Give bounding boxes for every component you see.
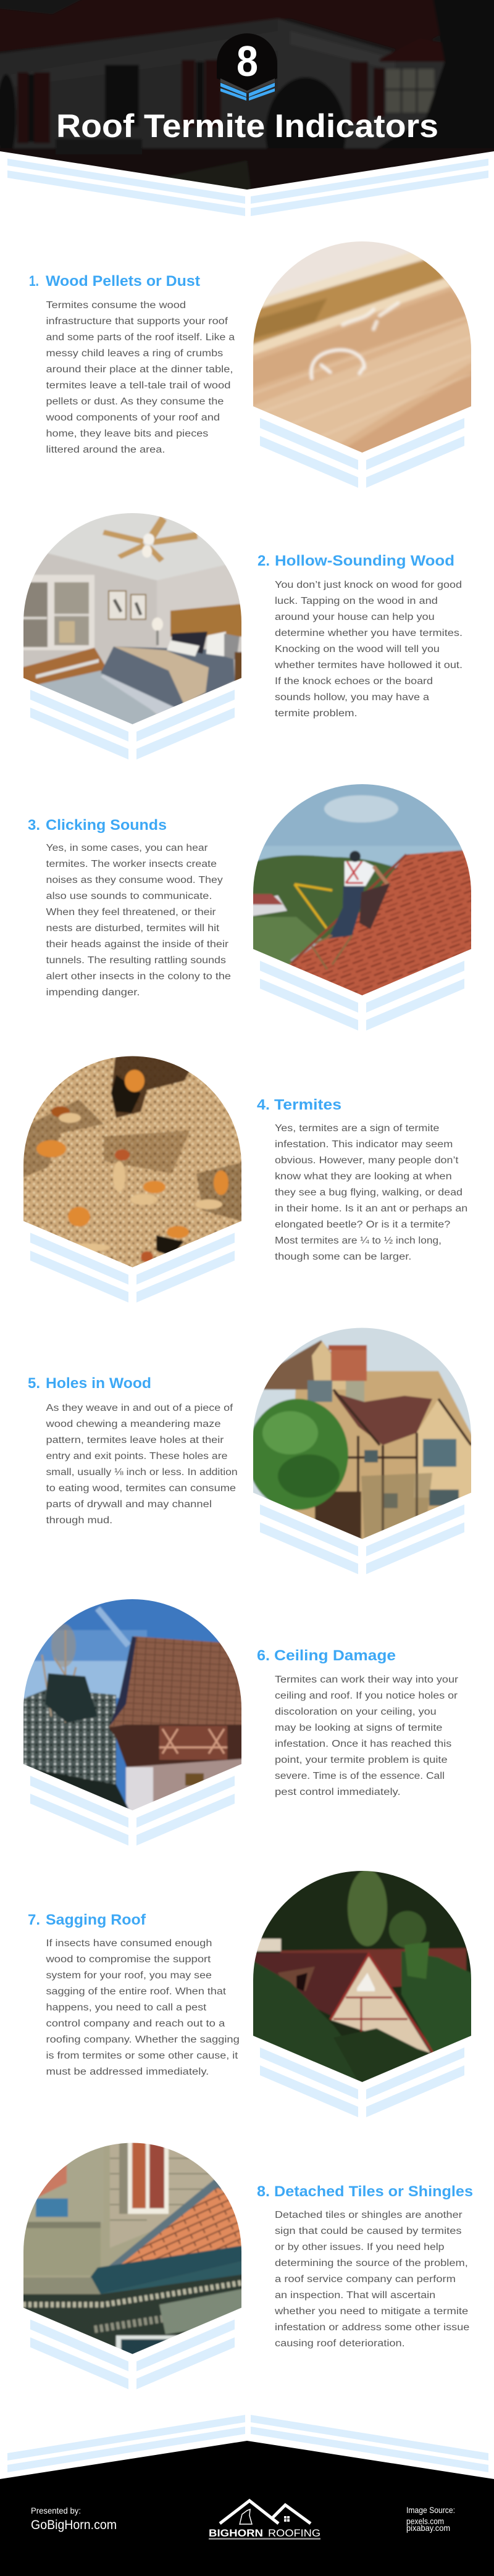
text block 5: wood chewing a meandering maze <box>45 1419 220 1429</box>
text block 7 <box>45 1938 240 2077</box>
text block 4: though some can be larger. <box>275 1252 411 1262</box>
text block 4 <box>275 1123 467 1262</box>
heading 7: 7. <box>28 1912 40 1928</box>
text block 7: wood to compromise the support <box>45 1954 211 1965</box>
logo: Bighorn Roofing: BIGHORN <box>209 2527 263 2539</box>
bed <box>101 674 173 714</box>
text block 6: infestation. Once it has reached this <box>275 1739 451 1749</box>
text block 7: system for your roof, you may see <box>46 1970 212 1981</box>
text block 6: may be looking at signs of termite <box>275 1723 442 1733</box>
image: timber barn <box>17 1593 248 1846</box>
heading 8: Detached Tiles or Shingles <box>274 2183 473 2200</box>
text block 1: around their place at the dinner table, <box>46 364 233 375</box>
text block 8 <box>274 2210 469 2349</box>
image: roofer on tiled roof <box>247 778 477 1031</box>
ceiling fan <box>103 516 198 562</box>
image: tudor house <box>247 1321 477 1574</box>
panel: 8 detached tiles or shingles <box>17 2136 473 2390</box>
text block 7: must be addressed immediately. <box>46 2067 209 2077</box>
heading 5: Holes in Wood <box>46 1375 151 1392</box>
image: wooden facade with orange tiles <box>17 2136 248 2390</box>
termites <box>34 1069 228 1262</box>
presented by: GoBigHorn.com <box>31 2518 117 2532</box>
text block 3 <box>46 843 231 998</box>
text block 7: control company and reach out to a <box>46 2018 225 2029</box>
panel: 4 termites <box>17 1050 467 1303</box>
panel: 2 hollow-sounding wood <box>17 507 463 759</box>
text block 3: When they feel threatened, or their <box>46 907 216 918</box>
text block 2: Knocking on the wood will tell you <box>275 644 440 654</box>
heading 3: 3. <box>28 817 40 834</box>
text block 5: pattern, termites leave holes at their <box>46 1435 224 1445</box>
title: Roof Termite Indicators <box>56 108 438 144</box>
text block 4: Most termites are ¼ to ½ inch long, <box>275 1236 442 1246</box>
heading 4: Termites <box>274 1097 341 1113</box>
text block 6: point, your termite problem is quite <box>275 1755 448 1765</box>
floor <box>23 647 106 685</box>
header photo: house at dusk <box>0 0 494 204</box>
logo: Bighorn Roofing <box>209 2501 320 2540</box>
text block 2: whether termites have hollowed it out. <box>274 660 463 671</box>
text block 1 <box>45 300 235 455</box>
headboard <box>170 603 248 637</box>
heading 6: 6. <box>257 1647 270 1664</box>
text block 8: determining the source of the problem, <box>275 2258 468 2269</box>
text block 7: roofing company. Whether the sagging <box>46 2034 240 2045</box>
header stripes <box>7 159 488 216</box>
text block 3: tunnels. The resulting rattling sounds <box>46 955 226 966</box>
text block 4: obvious. However, many people don’t <box>275 1155 459 1166</box>
footer background <box>0 2441 494 2576</box>
text block 4: know what they are looking at when <box>275 1171 452 1182</box>
text block 7: If insects have consumed enough <box>46 1938 212 1949</box>
text block 3: termites. The worker insects create <box>46 859 217 869</box>
image source: pexels.com <box>406 2516 444 2526</box>
logo: Bighorn Roofing: ROOFING <box>268 2527 320 2539</box>
text block 8: or by other issues. If you need help <box>275 2242 445 2252</box>
text block 7: happens, you need to call a pest <box>46 2002 207 2013</box>
roofer <box>329 886 364 939</box>
image source: pixabay.com <box>406 2523 450 2533</box>
text block 3: Yes, in some cases, you can hear <box>46 843 207 853</box>
text block 8: infestation or address some other issue <box>275 2322 469 2333</box>
text block 4: they see a bug flying, walking, or dead <box>275 1187 463 1198</box>
text block 8: a roof service company can perform <box>275 2274 456 2285</box>
text block 5: small, usually ⅛ inch or less. In addition <box>46 1467 238 1478</box>
text block 3: their heads against the inside of their <box>46 939 228 950</box>
text block 6: severe. Time is of the essence. Call <box>275 1771 445 1781</box>
image: damaged red roof in forest <box>247 1865 477 2117</box>
panel: 6 ceiling damage <box>17 1593 458 1846</box>
heading 8: 8. <box>257 2183 270 2200</box>
text block 3: nests are disturbed, termites will hit <box>46 923 220 934</box>
text block 7: sagging of the entire roof. When that <box>46 1986 227 1997</box>
text block 6: discoloration on your ceiling, you <box>275 1707 437 1717</box>
text block 1: messy child leaves a ring of crumbs <box>46 348 223 359</box>
text block 2: luck. Tapping on the wood in and <box>275 596 438 606</box>
image source: Image Source: <box>406 2505 455 2515</box>
panel: 7 sagging roof <box>28 1865 477 2117</box>
text block 1: Termites consume the wood <box>46 300 186 311</box>
text block 2: You don’t just knock on wood for good <box>275 580 462 590</box>
heading 1: Wood Pellets or Dust <box>46 273 200 290</box>
badge with number 8: 8 <box>237 37 258 85</box>
text block 1: wood components of your roof and <box>45 412 220 423</box>
footer stripes <box>7 2415 488 2472</box>
heading 4: 4. <box>257 1097 270 1113</box>
text block 5: to eating wood, termites can consume <box>46 1483 236 1494</box>
text block 5: entry and exit points. These holes are <box>46 1451 227 1462</box>
text block 2: If the knock echoes or the board <box>275 676 433 687</box>
image: wood floor with dust <box>247 235 477 488</box>
text block 6: ceiling and roof. If you notice holes or <box>275 1691 458 1701</box>
image: bedroom <box>17 507 248 759</box>
text block 6: pest control immediately. <box>275 1787 401 1797</box>
text block 4: Yes, termites are a sign of termite <box>275 1123 439 1134</box>
text block 3: impending danger. <box>46 987 140 998</box>
text block 2: determine whether you have termites. <box>275 628 463 638</box>
footer <box>0 2415 494 2576</box>
text block 8: whether you need to mitigate a termite <box>274 2306 468 2317</box>
heading 6: Ceiling Damage <box>274 1647 396 1664</box>
text block 8: Detached tiles or shingles are another <box>275 2210 463 2220</box>
panel: 1 wood pellets or dust <box>29 235 477 488</box>
text block 4: in their home. Is it an ant or perhaps an <box>275 1203 467 1214</box>
text block 1: littered around the area. <box>46 445 165 455</box>
text block 5: parts of drywall and may channel <box>46 1499 212 1510</box>
text block 2: sounds hollow, you may have a <box>275 692 429 703</box>
wall pictures <box>109 591 126 619</box>
text block 3: also use sounds to communicate. <box>46 891 212 901</box>
text block 2: around your house can help you <box>275 612 435 622</box>
panel: 3 clicking sounds <box>28 778 477 1031</box>
heading 5: 5. <box>28 1375 40 1392</box>
heading 3: Clicking Sounds <box>46 817 167 834</box>
text block 6 <box>275 1675 458 1797</box>
panel: 5 holes in wood <box>28 1321 477 1574</box>
text block 8: causing roof deterioration. <box>275 2338 405 2349</box>
text block 4: infestation. This indicator may seem <box>275 1139 453 1150</box>
text block 5: As they weave in and out of a piece of <box>46 1403 233 1413</box>
heading 7: Sagging Roof <box>46 1912 146 1928</box>
text block 4: elongated beetle? Or is it a termite? <box>275 1219 451 1230</box>
image source <box>406 2505 455 2533</box>
heading 2: Hollow-Sounding Wood <box>275 553 454 569</box>
presented by: Presented by: <box>31 2506 81 2515</box>
text block 3: alert other insects in the colony to the <box>46 971 231 982</box>
text block 2 <box>274 580 463 719</box>
text block 7: is from termites or some other cause, it <box>46 2051 238 2061</box>
heading 1: 1. <box>29 273 39 290</box>
text block 5: through mud. <box>46 1515 112 1526</box>
text block 6: Termites can work their way into your <box>275 1675 458 1685</box>
text block 8: an inspection. That will ascertain <box>275 2290 435 2301</box>
text block 1: home, they leave bits and pieces <box>46 429 209 439</box>
text block 1: and some parts of the roof itself. Like a <box>46 332 235 343</box>
presented by <box>31 2506 117 2532</box>
text block 5 <box>45 1403 238 1526</box>
text block 8: sign that could be caused by termites <box>275 2226 462 2236</box>
text block 1: termites leave a tell-tale trail of wood <box>46 380 231 391</box>
window <box>17 575 94 650</box>
header <box>0 0 494 216</box>
text block 1: pellets or dust. As they consume the <box>46 396 224 407</box>
badge with number 8 <box>217 33 277 101</box>
text block 1: infrastructure that supports your roof <box>46 316 228 327</box>
text block 2: termite problem. <box>275 708 358 719</box>
text block 3: noises as they consume wood. They <box>46 875 223 885</box>
image: termites on mound <box>17 1050 248 1303</box>
heading 2: 2. <box>257 553 270 569</box>
